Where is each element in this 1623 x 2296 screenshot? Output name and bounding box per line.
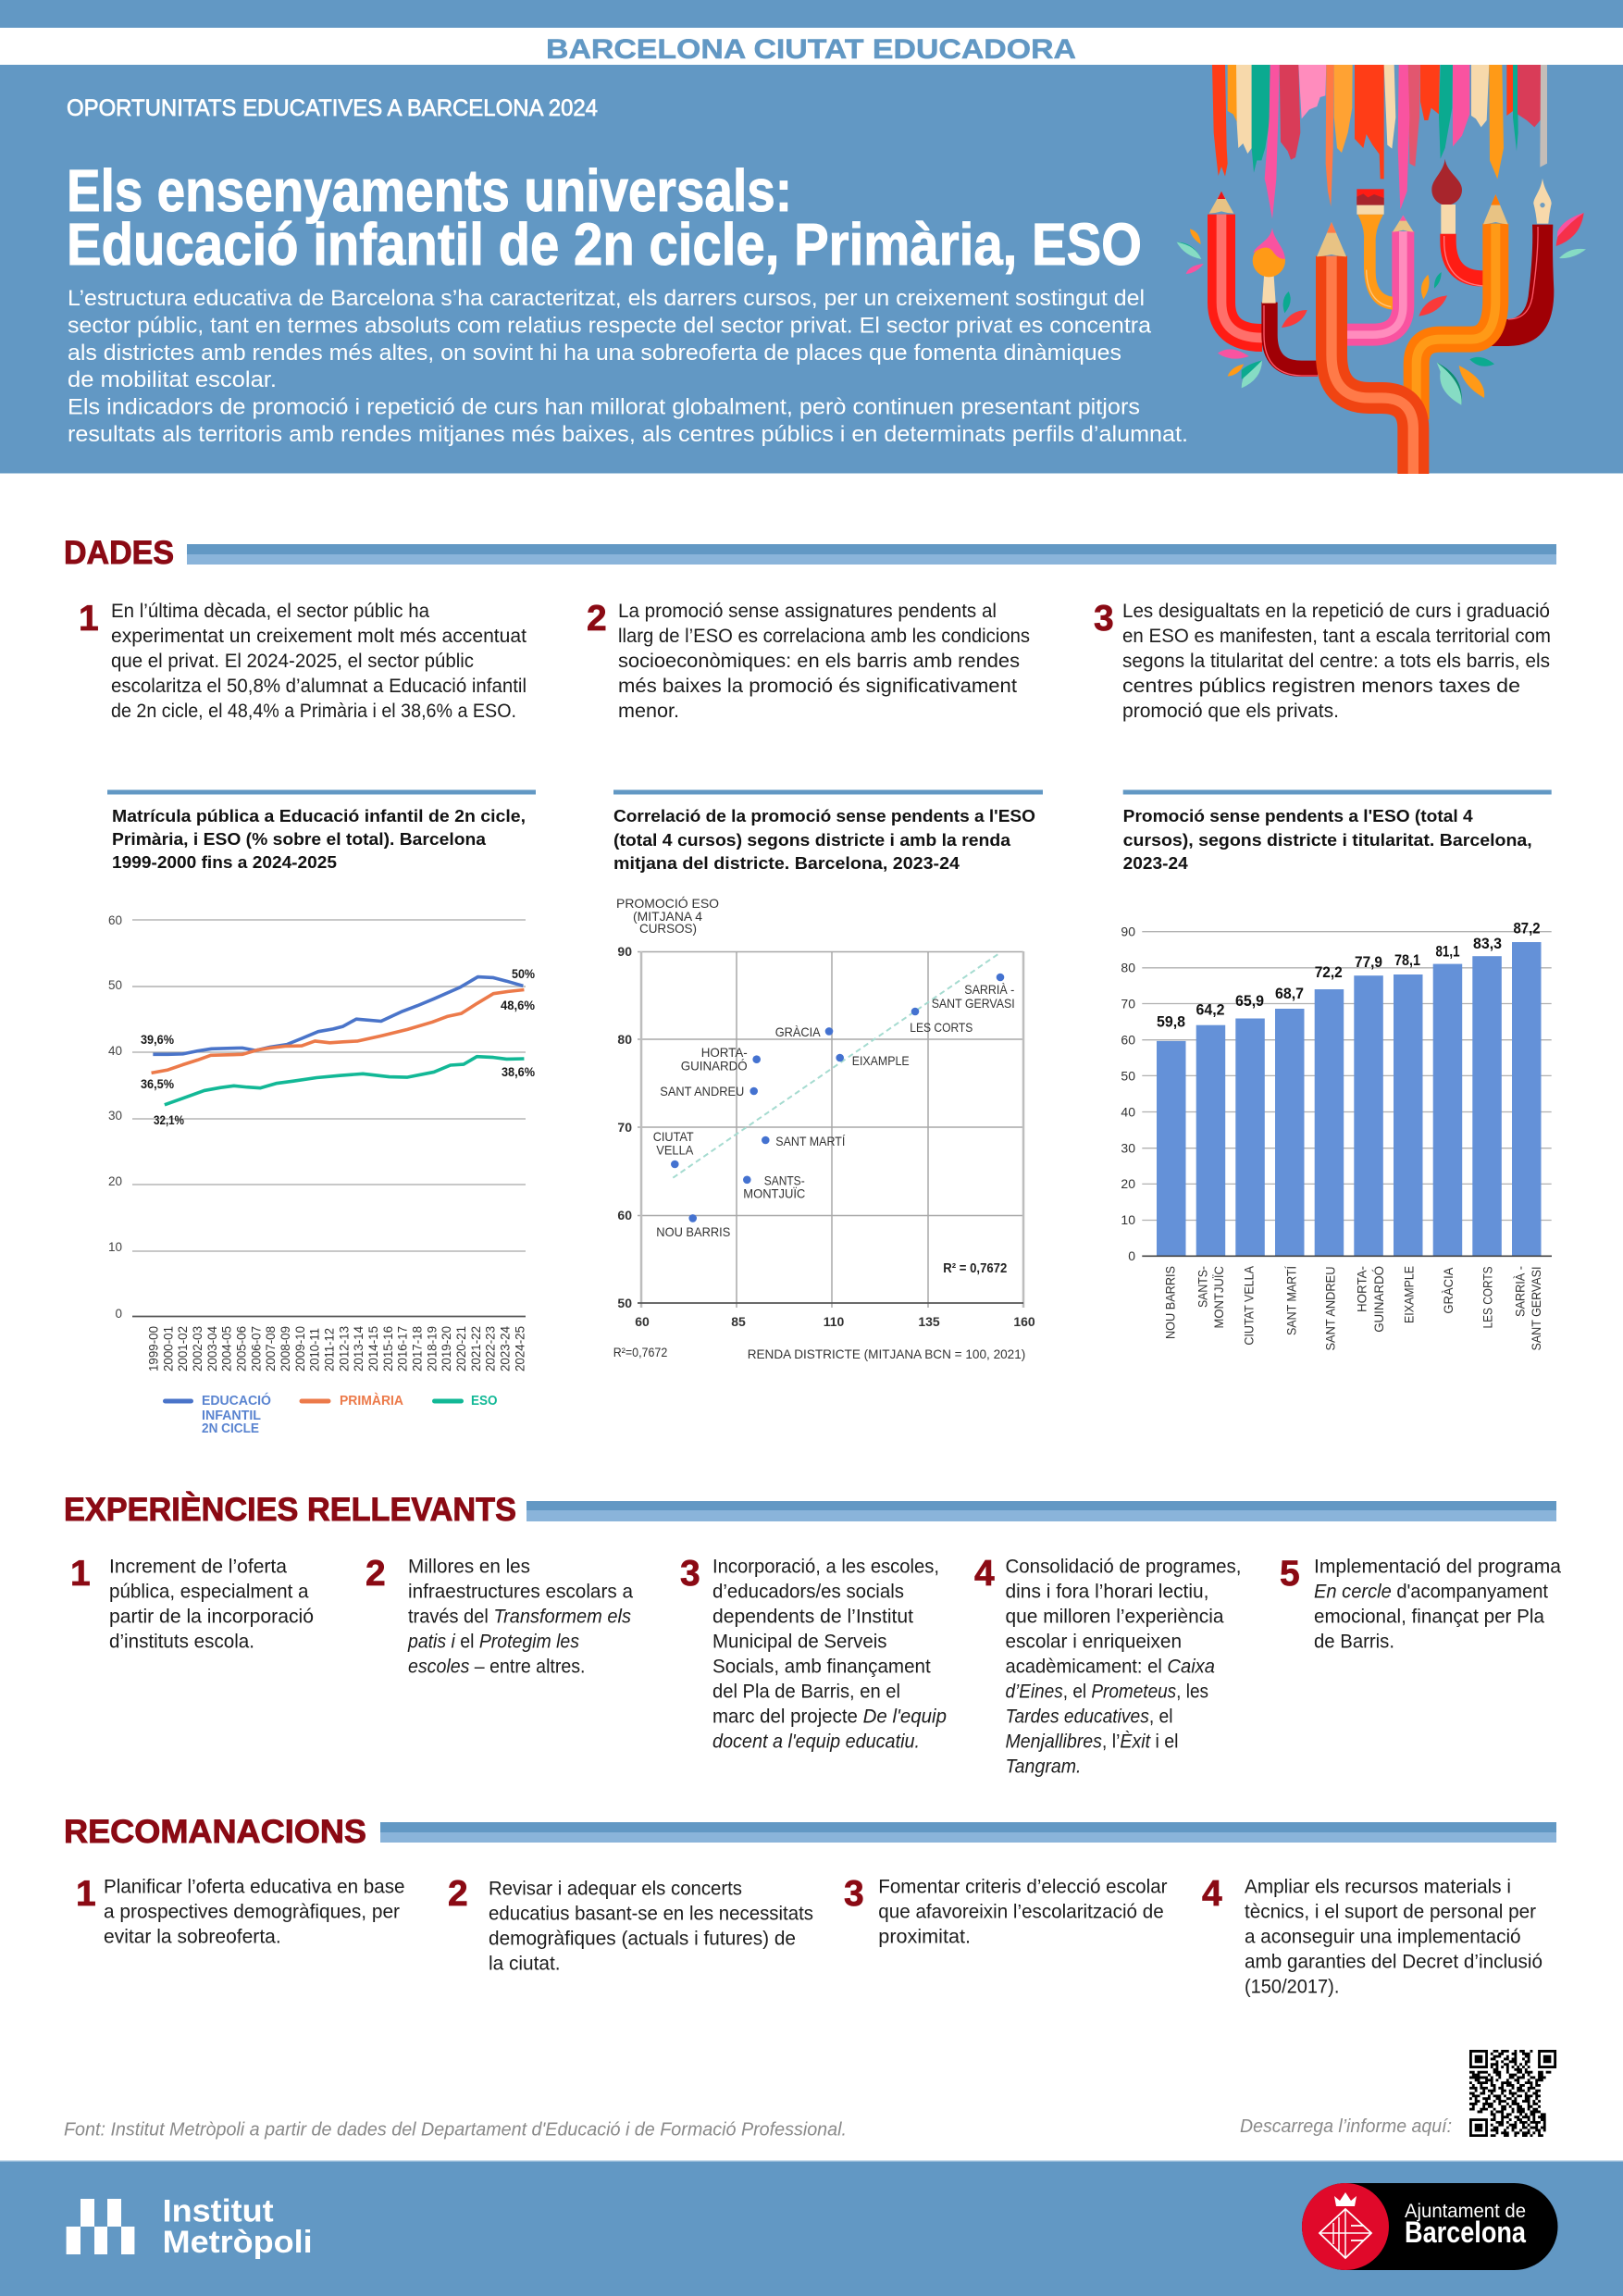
recommendation 2 (448, 1874, 813, 1975)
legend: PRIMÀRIA (340, 1393, 403, 1409)
experience 2: patis i el Protegim les (407, 1631, 579, 1653)
footnote R squared: R²=0,7672 (613, 1345, 667, 1359)
recommendation 4: 4 (1202, 1874, 1222, 1914)
data point 3: Les desigualtats en la repetició de curs i graduació (1122, 601, 1550, 622)
main title: Educació infantil de 2n cicle, Primària, ESO (67, 211, 1142, 278)
experience 1: partir de la incorporació (109, 1607, 314, 1627)
data point 2: menor. (618, 701, 679, 722)
x axis title: RENDA DISTRICTE (MITJANA BCN = 100, 2021) (748, 1347, 1025, 1361)
data point 2: més baixes la promoció és significativament (618, 676, 1017, 697)
x axis categories: 2002-03 (191, 1326, 204, 1371)
district labels: SANT GERVASI (932, 996, 1015, 1011)
y axis labels: 70 (1121, 996, 1135, 1011)
chart title: cursos), segons districte i titularitat. Barcelona, (1123, 830, 1532, 850)
recommendation 1: 1 (76, 1874, 96, 1914)
experience 2: escoles – entre altres. (408, 1657, 585, 1677)
district labels: NOU BARRIS (656, 1224, 730, 1239)
data points (671, 974, 1004, 1222)
experience 3: marc del projecte De l'equip (712, 1706, 947, 1727)
recommendation 4 (1202, 1874, 1542, 1998)
x axis categories: 2008-09 (279, 1326, 292, 1371)
logo: Institut Metròpoli: Metròpoli (163, 2225, 313, 2260)
QR code (1469, 2050, 1556, 2137)
data point 2: La promoció sense assignatures pendents al (618, 601, 997, 622)
data point 2: socioeconòmiques: en els barris amb rendes (618, 651, 1020, 672)
bar values: 77,9 (1355, 953, 1382, 971)
data labels: 38,6% (502, 1064, 535, 1079)
section heading: Recomanacions: RECOMANACIONS (64, 1814, 366, 1850)
experience 3: Incorporació, a les escoles, (712, 1557, 939, 1577)
x axis categories: 2001-02 (176, 1326, 190, 1371)
axis tick labels: 50 (617, 1296, 632, 1310)
logo: Institut Metròpoli (67, 2193, 313, 2260)
district labels: MONTJUÏC (743, 1186, 805, 1201)
y axis title: CURSOS) (639, 921, 697, 936)
chart title: Matrícula pública a Educació infantil de 2n cicle, (112, 806, 526, 825)
legend: 2N CICLE (202, 1421, 259, 1436)
intro paragraph: de mobilitat escolar. (68, 367, 277, 392)
legend: ESO (471, 1394, 498, 1409)
district labels: HORTA- (701, 1045, 748, 1060)
bar values: 64,2 (1196, 1001, 1225, 1019)
icon: flat orange brush (1357, 189, 1393, 310)
axis tick labels: 70 (617, 1120, 632, 1135)
district labels: EIXAMPLE (1402, 1266, 1417, 1323)
bar values (1157, 919, 1540, 1030)
main title (67, 157, 1142, 278)
y axis labels: 10 (1121, 1212, 1135, 1227)
data point 3: en ESO es manifesten, tant a escala territorial com (1122, 626, 1551, 647)
district labels: LES CORTS (910, 1020, 973, 1035)
section heading: Experiències rellevants: EXPERIÈNCIES RELLEVANTS (64, 1491, 516, 1528)
source note: Font: Institut Metròpoli a partir de dades del Departament d'Educació i de Formació Professional. (64, 2120, 847, 2141)
experience 3: Municipal de Serveis (712, 1631, 886, 1653)
bar values: 83,3 (1473, 935, 1502, 952)
district labels: GUINARDÓ (1371, 1266, 1386, 1333)
download note: Descarrega l’informe aquí: (1240, 2116, 1452, 2137)
icon: central orange pencil (1317, 222, 1413, 474)
y axis labels: 90 (1121, 924, 1135, 938)
bar values: 68,7 (1275, 985, 1304, 1002)
recommendation 4: (150/2017). (1245, 1977, 1339, 1998)
chart title (1123, 806, 1532, 873)
experience 5: de Barris. (1314, 1631, 1394, 1653)
y axis labels: 30 (108, 1109, 122, 1123)
district labels: NOU BARRIS (1162, 1266, 1177, 1339)
axis tick labels (617, 944, 1035, 1329)
top banner: Barcelona Ciutat Educadora (0, 0, 1623, 65)
logo: Ajuntament de Barcelona: Barcelona (1405, 2215, 1526, 2249)
icon: fountain pen (1487, 179, 1554, 346)
icon: dark red brush with orange tip (1253, 228, 1318, 376)
x axis categories: 2017-18 (410, 1326, 424, 1371)
y axis labels: 30 (1121, 1140, 1135, 1155)
district labels: GUINARDÓ (681, 1059, 748, 1074)
recommendation 2: 2 (448, 1874, 468, 1914)
district labels: SANTS- (1195, 1266, 1209, 1308)
district labels: CIUTAT (653, 1129, 694, 1144)
recommendation 1: evitar la sobreoferta. (104, 1927, 281, 1948)
experience 5 (1280, 1554, 1561, 1653)
recommendation 3: 3 (844, 1874, 864, 1914)
x axis categories: 2014-15 (366, 1326, 380, 1371)
icon: left red pencil (1209, 192, 1262, 338)
x axis categories: 2015-16 (381, 1326, 395, 1371)
x axis categories: 2010-11 (308, 1328, 322, 1371)
experience 5: emocional, finançat per Pla (1314, 1607, 1544, 1627)
experience 2: Millores en les (408, 1557, 530, 1577)
paint drips (1212, 65, 1547, 219)
intro paragraph: als districtes amb rendes més altes, on sovint hi ha una sobreoferta de places que fomenta dinàmiques (68, 341, 1121, 366)
district labels: SANTS- (764, 1173, 805, 1188)
data point 1: 1 (79, 599, 99, 639)
district labels: SARRIÀ - (1512, 1266, 1527, 1317)
experience 1: d’instituts escola. (109, 1631, 254, 1653)
intro paragraph: resultats als territoris amb rendes mitjanes més baixes, als centres públics i en determinats perfils d’alumnat. (68, 422, 1188, 447)
x axis categories: 2000-01 (161, 1326, 175, 1371)
x axis categories: 2019-20 (440, 1326, 453, 1371)
experience 3 (680, 1554, 947, 1753)
experience 3: 3 (680, 1554, 700, 1594)
district labels: EIXAMPLE (852, 1053, 910, 1068)
x axis categories: 2003-04 (205, 1326, 219, 1371)
experience 1: 1 (70, 1554, 91, 1594)
experience 4: escolar i enriqueixen (1005, 1631, 1182, 1653)
scatter chart: promotion vs income (613, 790, 1043, 1361)
legend: INFANTIL (202, 1409, 261, 1423)
x axis categories: 2006-07 (249, 1326, 263, 1371)
section heading: DADES (64, 535, 1556, 571)
experience 3: dependents de l’Institut (712, 1607, 913, 1627)
y axis labels: 40 (108, 1044, 122, 1058)
axis tick labels: 80 (617, 1032, 632, 1047)
recommendation 2: demogràfiques (actuals i futures) de (489, 1929, 796, 1950)
recommendation 2: la ciutat. (489, 1954, 561, 1975)
logo: Ajuntament de Barcelona (1302, 2183, 1558, 2270)
axis tick labels: 60 (635, 1314, 650, 1329)
axis tick labels: 90 (617, 944, 632, 959)
y axis labels: 50 (108, 978, 122, 992)
y axis labels: 80 (1121, 961, 1135, 975)
y axis labels: 50 (1121, 1068, 1135, 1083)
bar chart: promotion by district (1121, 790, 1552, 1351)
experience 4: 4 (974, 1554, 995, 1594)
chart title (613, 806, 1035, 873)
district labels: GRÀCIA (1441, 1267, 1456, 1314)
y axis labels: 0 (1128, 1248, 1135, 1263)
y axis labels (1121, 924, 1135, 1263)
chart title: Primària, i ESO (% sobre el total). Barcelona (112, 829, 487, 849)
header panel (0, 65, 1623, 474)
x axis categories: 2024-25 (513, 1326, 527, 1371)
legend: EDUCACIÓ (202, 1392, 271, 1409)
trend line (673, 952, 1000, 1178)
experience 2: través del Transformem els (408, 1607, 631, 1627)
logo: Institut Metròpoli: Institut (163, 2193, 274, 2228)
chart title: 1999-2000 fins a 2024-2025 (112, 852, 337, 872)
R squared callout: R² = 0,7672 (943, 1261, 1007, 1276)
bar values: 78,1 (1394, 951, 1420, 969)
y axis title: (MITJANA 4 (633, 909, 702, 924)
y axis title: PROMOCIÓ ESO (616, 896, 719, 911)
experience 4: Tardes educatives, el (1005, 1706, 1173, 1727)
main title: Els ensenyaments universals: (67, 157, 792, 224)
axis tick labels: 60 (617, 1208, 632, 1222)
axis tick labels: 85 (731, 1314, 746, 1329)
recommendation 2: Revisar i adequar els concerts (489, 1879, 742, 1900)
axis tick labels: 135 (918, 1314, 940, 1329)
district labels: LES CORTS (1481, 1266, 1495, 1329)
district labels: HORTA- (1355, 1266, 1369, 1312)
experience 3: docent a l'equip educatiu. (712, 1731, 920, 1753)
bar values: 65,9 (1235, 992, 1264, 1010)
y axis labels: 10 (108, 1240, 122, 1254)
experience 2: infraestructures escolars a (408, 1581, 633, 1603)
icon: city crest (1319, 2192, 1371, 2258)
x axis categories: 2007-08 (264, 1326, 278, 1371)
experience 1: Increment de l’oferta (109, 1557, 287, 1577)
icon: leaves (1177, 213, 1586, 405)
x axis categories: 2022-23 (484, 1326, 498, 1371)
footer band (0, 2160, 1623, 2296)
intro paragraph: L’estructura educativa de Barcelona s’ha caracteritzat, els darrers cursos, per un creixement sostingut del (68, 286, 1145, 311)
data labels (141, 966, 536, 1127)
experience 5: En cercle d'acompanyament (1314, 1581, 1548, 1603)
x axis categories: 2013-14 (352, 1326, 365, 1371)
experience 4: Consolidació de programes, (1005, 1557, 1242, 1577)
district labels: SARRIÀ - (964, 982, 1015, 997)
experience 5: 5 (1280, 1554, 1300, 1594)
data labels: 32,1% (154, 1112, 184, 1127)
bar values: 81,1 (1436, 943, 1460, 961)
district labels: VELLA (656, 1142, 694, 1157)
chart title: Correlació de la promoció sense pendents a l'ESO (613, 806, 1035, 825)
data point 3: segons la titularitat del centre: a tots els barris, els (1122, 651, 1550, 672)
bar values: 87,2 (1514, 919, 1540, 937)
recommendation 4: amb garanties del Decret d’inclusió (1245, 1952, 1542, 1973)
experience 4 (974, 1554, 1242, 1777)
section heading: Experiències rellevants (64, 1491, 1556, 1528)
data point 3: promoció que els privats. (1122, 701, 1339, 722)
data labels: 48,6% (501, 998, 536, 1012)
x axis categories: 2020-21 (454, 1326, 468, 1371)
district labels: SANT MARTÍ (1284, 1266, 1299, 1335)
x axis categories: 1999-00 (146, 1326, 161, 1371)
x axis categories: 2018-19 (425, 1326, 439, 1371)
recommendation 4: tècnics, i el suport de personal per (1245, 1902, 1536, 1923)
experience 1 (70, 1554, 314, 1653)
data point 1: escolaritza el 50,8% d’alumnat a Educació infantil (111, 676, 527, 697)
district labels (653, 982, 1015, 1239)
experience 2: 2 (365, 1554, 386, 1594)
data point 3: centres públics registren menors taxes de (1122, 676, 1520, 697)
y axis labels: 0 (115, 1307, 122, 1321)
y axis labels: 60 (1121, 1033, 1135, 1048)
bars (1157, 942, 1542, 1256)
data point 1: de 2n cicle, el 48,4% a Primària i el 38,6% a ESO. (111, 701, 516, 722)
experience 4: d’Eines, el Prometeus, les (1005, 1681, 1208, 1703)
axis tick labels: 110 (824, 1314, 845, 1329)
chart title: mitjana del districte. Barcelona, 2023-24 (613, 853, 960, 873)
experience 3: d’educadors/es socials (712, 1581, 904, 1603)
x axis categories (146, 1326, 527, 1371)
grid (638, 951, 1023, 1308)
y axis labels: 20 (108, 1174, 122, 1188)
axis tick labels: 160 (1013, 1314, 1035, 1329)
experience 4: que milloren l’experiència (1005, 1607, 1224, 1627)
data point 1: experimentat un creixement molt més accentuat (111, 626, 527, 647)
data lines (152, 977, 524, 1105)
x axis categories: 2009-10 (293, 1326, 307, 1371)
data point 2: 2 (587, 599, 607, 639)
data point 2 (587, 599, 1030, 722)
experience 4: Menjallibres, l’Èxit i el (1005, 1731, 1179, 1753)
y axis title (616, 896, 719, 936)
experience 4: acadèmicament: el Caixa (1005, 1657, 1215, 1677)
x axis categories: 2021-22 (469, 1326, 483, 1371)
bar values: 59,8 (1157, 1012, 1185, 1030)
recommendation 1: a prospectives demogràfiques, per (104, 1902, 400, 1923)
y axis labels: 60 (108, 913, 122, 927)
x axis categories: 2004-05 (220, 1326, 234, 1371)
district labels: SANT MARTÍ (775, 1134, 845, 1148)
data point 3: 3 (1094, 599, 1114, 639)
bar values: 72,2 (1315, 963, 1343, 981)
y axis labels: 20 (1121, 1176, 1135, 1191)
recommendation 3: proximitat. (878, 1927, 971, 1948)
data point 1: En l’última dècada, el sector públic ha (111, 601, 429, 622)
district labels: MONTJUÏC (1211, 1266, 1226, 1329)
recommendation 3: Fomentar criteris d’elecció escolar (878, 1877, 1168, 1898)
intro paragraph: sector públic, tant en termes absoluts com relatius respecte del sector privat. El sector privat es concentra (68, 313, 1152, 339)
data labels: 39,6% (141, 1032, 174, 1047)
data point 3 (1094, 599, 1551, 722)
section heading: DADES: DADES (64, 535, 174, 571)
experience 2 (365, 1554, 633, 1677)
data labels: 36,5% (141, 1076, 174, 1091)
line chart: public enrolment (107, 790, 536, 1436)
data labels: 50% (512, 966, 535, 981)
district labels: CIUTAT VELLA (1241, 1265, 1256, 1346)
x axis categories: 2016-17 (396, 1326, 410, 1371)
intro paragraph (68, 286, 1188, 447)
data point 1: que el privat. El 2024-2025, el sector públic (111, 651, 474, 672)
icon: orange pencil (1417, 194, 1508, 419)
legend (163, 1392, 498, 1436)
top banner: Barcelona Ciutat Educadora: BARCELONA CIUTAT EDUCADORA (546, 34, 1076, 65)
chart title (112, 806, 526, 872)
recommendation 3: que afavoreixin l’escolarització de (878, 1902, 1164, 1923)
x axis categories: 2011-12 (322, 1328, 337, 1371)
chart title: 2023-24 (1123, 853, 1188, 873)
district labels: SANT ANDREU (660, 1084, 744, 1098)
experience 4: dins i fora l’horari lectiu, (1005, 1581, 1208, 1603)
y axis labels: 40 (1121, 1105, 1135, 1120)
icon: pink pencil (1344, 216, 1414, 335)
experience 3: del Pla de Barris, en el (712, 1681, 900, 1703)
section heading: Recomanacions (64, 1814, 1556, 1850)
data point 2: llarg de l’ESO es correlaciona amb les condicions (618, 626, 1030, 647)
experience 3: Socials, amb finançament (712, 1657, 931, 1677)
x axis categories: 2023-24 (498, 1326, 512, 1371)
x axis categories: 2005-06 (235, 1326, 248, 1371)
intro paragraph: Els indicadors de promoció i repetició de curs han millorat globalment, però continuen presentant pitjors (68, 394, 1140, 420)
recommendation 2: educatius basant-se en les necessitats (489, 1904, 813, 1925)
recommendation 1 (76, 1874, 405, 1948)
experience 5: Implementació del programa (1314, 1557, 1561, 1577)
district labels: GRÀCIA (775, 1024, 821, 1039)
icon: red round brush (1431, 159, 1483, 286)
data point 1 (79, 599, 527, 722)
district labels: SANT ANDREU (1323, 1266, 1338, 1351)
recommendation 3 (844, 1874, 1168, 1948)
y axis labels (108, 913, 122, 1321)
illustration: paint strokes and drawing tools tree (1177, 65, 1586, 474)
experience 4: Tangram. (1005, 1756, 1081, 1777)
logo: Ajuntament de Barcelona: Ajuntament de (1405, 2201, 1526, 2222)
x axis categories: 2012-13 (337, 1326, 351, 1371)
district labels (1162, 1265, 1543, 1351)
recommendation 4: Ampliar els recursos materials i (1245, 1877, 1511, 1898)
chart title: Promoció sense pendents a l'ESO (total 4 (1123, 806, 1473, 825)
header kicker: OPORTUNITATS EDUCATIVES A BARCELONA 2024 (67, 95, 598, 121)
chart title: (total 4 cursos) segons districte i amb la renda (613, 830, 1011, 850)
recommendation 4: a aconseguir una implementació (1245, 1927, 1521, 1948)
district labels: SANT GERVASI (1529, 1266, 1543, 1351)
recommendation 1: Planificar l’oferta educativa en base (104, 1877, 405, 1898)
experience 1: pública, especialment a (109, 1581, 309, 1603)
